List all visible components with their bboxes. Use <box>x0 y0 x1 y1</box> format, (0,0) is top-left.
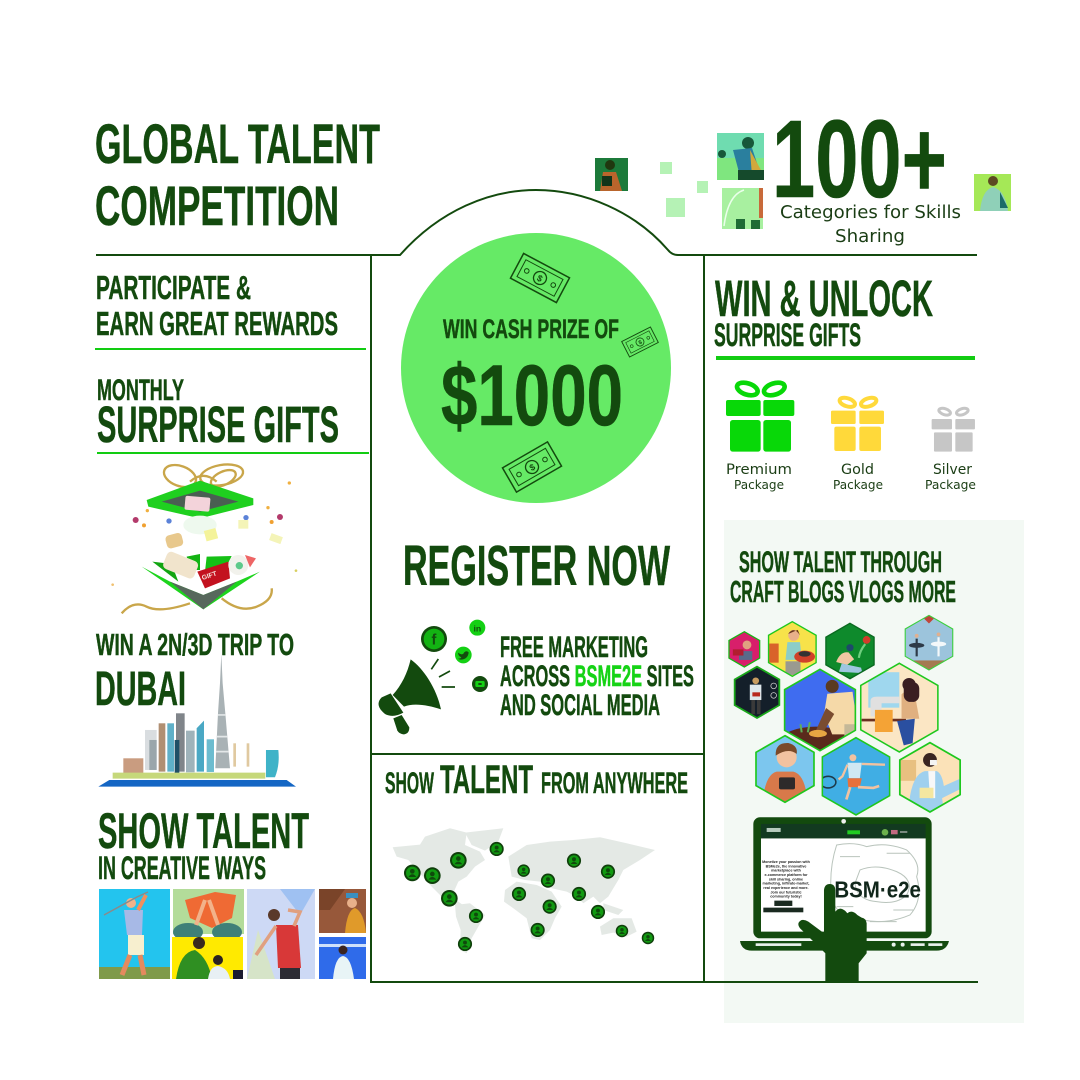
heading: show talent in creative ways <box>98 803 309 886</box>
site copy: Monetize your passion with <box>762 860 810 864</box>
panel: light background talent panel <box>724 520 1024 1023</box>
money icon bottom <box>502 442 562 492</box>
money icon top <box>510 253 570 303</box>
box base <box>142 554 260 609</box>
tile: tutor <box>172 937 243 979</box>
stat: 100+ categories: 100+ <box>772 98 947 221</box>
icon: megaphone with social bubbles <box>379 620 488 734</box>
heading: show talent in creative ways: SHOW TALENT <box>98 803 309 859</box>
hexagon: doctor <box>895 743 965 812</box>
site copy: BSMe2e, the innovative <box>766 864 806 868</box>
site buttons <box>763 901 803 912</box>
text: free marketing: AND SOCIAL MEDIA <box>500 689 660 722</box>
label: premium package: Package <box>734 478 784 492</box>
heading: monthly surprise gifts: MONTHLY <box>97 374 184 407</box>
site copy: Join our futuristic <box>770 890 802 894</box>
illustration: open gift box <box>111 461 297 613</box>
icon: premium gift <box>726 380 794 452</box>
heading: show talent in creative ways: IN CREATIVE WAYS <box>98 850 266 886</box>
prize text: $1000 <box>441 348 623 444</box>
prize circle <box>401 233 671 503</box>
towers <box>123 713 279 777</box>
heading: show talent from anywhere: TALENT <box>440 758 533 802</box>
title: GLOBAL TALENT <box>95 112 380 175</box>
thumbnail: chef <box>974 174 1011 211</box>
hexagon: reader <box>727 632 762 667</box>
text: free marketing <box>500 631 694 722</box>
decorative squares <box>660 162 708 217</box>
twitter bubble <box>455 647 472 663</box>
heading: register now: REGISTER NOW <box>403 534 670 598</box>
hexagon: gardener <box>784 668 856 752</box>
heading: participate and earn <box>95 270 366 350</box>
hexagon: ballet <box>902 615 956 671</box>
prize text <box>441 314 623 444</box>
label: gold package <box>833 462 883 492</box>
money icon right <box>622 327 658 357</box>
thumbnail: hockey player <box>717 133 764 180</box>
site copy: community today! <box>770 895 802 899</box>
stat: 100+ categories: Categories for Skills <box>780 202 961 223</box>
title <box>95 112 380 237</box>
world map with talent pins <box>393 828 655 953</box>
heading: win a trip to Dubai: WIN A 2N/3D TRIP TO <box>96 627 294 662</box>
icon: gold gift <box>831 396 884 451</box>
heading: win and unlock <box>714 270 975 360</box>
prize text: WIN CASH PRIZE OF <box>443 314 619 344</box>
site copy <box>762 860 810 899</box>
ground strip <box>113 773 265 779</box>
linkedin bubble: in <box>473 623 481 633</box>
label: silver package: Silver <box>933 462 972 478</box>
heading: show talent from anywhere: FROM ANYWHERE <box>541 767 688 800</box>
tile: craftsman <box>319 889 366 933</box>
label: premium package <box>726 462 792 492</box>
stat: 100+ categories: Sharing <box>835 226 905 247</box>
hexagon: sewing <box>855 663 944 752</box>
label: premium package: Premium <box>726 462 792 478</box>
tile: golfer <box>99 889 170 979</box>
money icon top: $ <box>535 273 544 284</box>
continents <box>393 828 655 953</box>
glow <box>183 516 217 534</box>
scroll and gift card <box>162 550 256 588</box>
money icon right: $ <box>638 339 644 346</box>
hexagon talent gallery <box>727 615 965 815</box>
icon: silver gift <box>932 407 975 452</box>
illustration: Dubai skyline <box>98 654 296 787</box>
screen <box>761 838 926 932</box>
thumbnail: pale scene <box>722 188 763 229</box>
floating category thumbnails <box>595 133 1011 229</box>
popcorn item <box>165 532 184 549</box>
heading: show talent from anywhere: SHOW <box>385 767 434 800</box>
water base <box>98 780 296 787</box>
Burj tower <box>215 654 230 768</box>
site copy: skill sharing, online <box>769 877 803 881</box>
money icon bottom: $ <box>528 462 537 473</box>
text: free marketing: FREE MARKETING <box>500 631 648 664</box>
site copy: marketplace with <box>771 869 801 873</box>
word cloud scribble <box>831 844 919 922</box>
hexagon: cricket <box>822 623 878 679</box>
sound lines <box>431 659 455 687</box>
heading: participate and earn: PARTICIPATE & <box>96 270 251 307</box>
heading: show talent through craft blogs vlogs more <box>730 546 956 609</box>
heading: monthly surprise gifts: SURPRISE GIFTS <box>97 396 339 453</box>
megaphone <box>379 659 441 734</box>
site copy: e-commerce platform for <box>764 873 808 877</box>
heading: monthly surprise gifts <box>97 374 369 454</box>
heading: win a trip to Dubai <box>95 627 294 716</box>
label: gold package: Package <box>833 478 883 492</box>
laptop base <box>740 941 949 951</box>
label: silver package <box>925 462 976 492</box>
label: gold package: Gold <box>841 462 874 478</box>
site copy: real experience and more. <box>763 886 809 890</box>
heading: win a trip to Dubai: DUBAI <box>95 663 186 716</box>
tile: pharmacist <box>319 937 366 979</box>
hand <box>798 884 867 982</box>
facebook bubble: f <box>432 632 437 648</box>
video bubble <box>472 676 488 692</box>
heading: win and unlock: SURPRISE GIFTS <box>714 317 861 353</box>
hexagon: photographer <box>755 734 815 804</box>
scroll and gift card: GIFT <box>201 571 218 582</box>
hexagon: musician <box>731 667 783 718</box>
hexagon: cook <box>765 622 820 676</box>
word mark: BSM·e2e <box>834 876 921 902</box>
stat: 100+ categories <box>772 98 961 247</box>
hexagon: tennis <box>817 738 895 815</box>
tile: knitting <box>173 889 244 941</box>
lid <box>147 481 253 518</box>
image collage: creative talents <box>99 889 366 979</box>
heading: show talent from anywhere <box>385 758 688 802</box>
pins <box>404 842 654 951</box>
laptop body <box>753 817 932 938</box>
camera dot <box>841 819 846 824</box>
title: COMPETITION <box>95 174 339 237</box>
thumbnail: gardener <box>595 158 628 191</box>
heading: participate and earn: EARN GREAT REWARDS <box>96 306 338 343</box>
label: silver package: Package <box>925 478 976 492</box>
site header <box>761 824 926 838</box>
text: free marketing: ACROSS BSME2E SITES <box>500 660 694 693</box>
illustration: laptop with hand <box>740 817 949 982</box>
tile: singer <box>247 889 315 979</box>
gold ribbon <box>122 461 272 613</box>
site copy: marketing, inflirate-market, <box>763 882 809 886</box>
confetti <box>111 481 297 586</box>
frame lines with arch <box>96 190 978 982</box>
